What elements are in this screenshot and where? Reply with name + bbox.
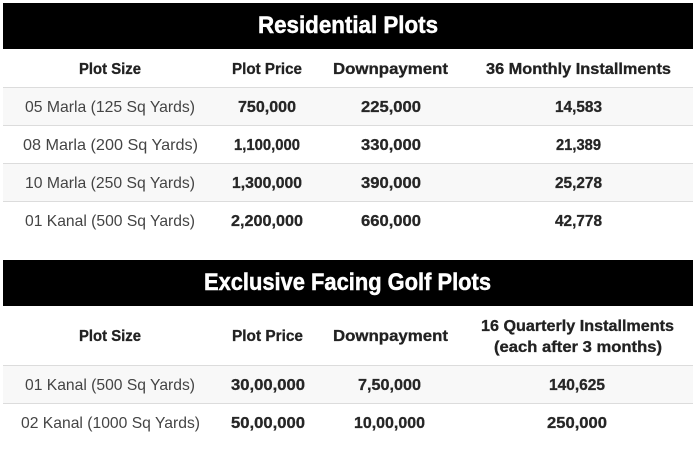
column headers: Plot Price [232,328,303,345]
row: 05 Marla: 14,583 [555,99,602,116]
row: 02 Kanal: 02 Kanal (1000 Sq Yards) [21,415,200,432]
column headers: (each after 3 months) [494,339,662,356]
row: 08 Marla [3,125,693,154]
row: 01 Kanal [3,201,693,230]
heading band: exclusive facing golf plots: Exclusive Facing Golf Plots [204,269,491,296]
column headers [79,61,671,78]
row: 02 Kanal: 50,00,000 [231,415,305,432]
row: 05 Marla: 225,000 [361,99,421,116]
row: 08 Marla: 21,389 [556,137,601,154]
row: 08 Marla: 330,000 [361,137,421,154]
heading band: residential plots: Residential Plots [258,12,438,39]
panel: exclusive facing golf plots table [3,260,693,432]
row: 02 Kanal: 10,00,000 [354,415,425,432]
row: 02 Kanal [3,403,693,432]
column headers [79,318,674,356]
row: 01 Kanal: 01 Kanal (500 Sq Yards) [25,213,195,230]
column headers: Plot Price [232,61,302,78]
panel: residential plots table [3,3,693,230]
row: 08 Marla: 1,100,000 [234,137,300,154]
row: 05 Marla [3,87,693,125]
row: 01 Kanal: 140,625 [549,377,605,394]
row: 10 Marla [3,163,693,201]
row: 01 Kanal [3,365,693,403]
row: 10 Marla: 25,278 [555,175,602,192]
column headers: 16 Quarterly Installments [481,318,674,335]
row: 01 Kanal: 2,200,000 [231,213,303,230]
row: 01 Kanal: 660,000 [361,213,421,230]
column headers: Plot Size [79,328,141,345]
row: 01 Kanal: 30,00,000 [231,377,305,394]
row: 10 Marla: 1,300,000 [232,175,302,192]
heading band: exclusive facing golf plots [3,260,693,306]
row: 02 Kanal: 250,000 [547,415,607,432]
column headers: Downpayment [333,61,449,78]
column headers: Downpayment [333,328,449,345]
heading band: residential plots [3,3,693,49]
row: 01 Kanal: 7,50,000 [358,377,421,394]
row: 08 Marla: 08 Marla (200 Sq Yards) [23,137,198,154]
row: 10 Marla: 10 Marla (250 Sq Yards) [25,175,195,192]
column headers: 36 Monthly Installments [486,61,671,78]
row: 05 Marla: 05 Marla (125 Sq Yards) [25,99,195,116]
column headers: Plot Size [79,61,141,78]
row: 10 Marla: 390,000 [361,175,421,192]
row: 01 Kanal: 01 Kanal (500 Sq Yards) [25,377,195,394]
row: 05 Marla: 750,000 [238,99,296,116]
row: 01 Kanal: 42,778 [555,213,602,230]
